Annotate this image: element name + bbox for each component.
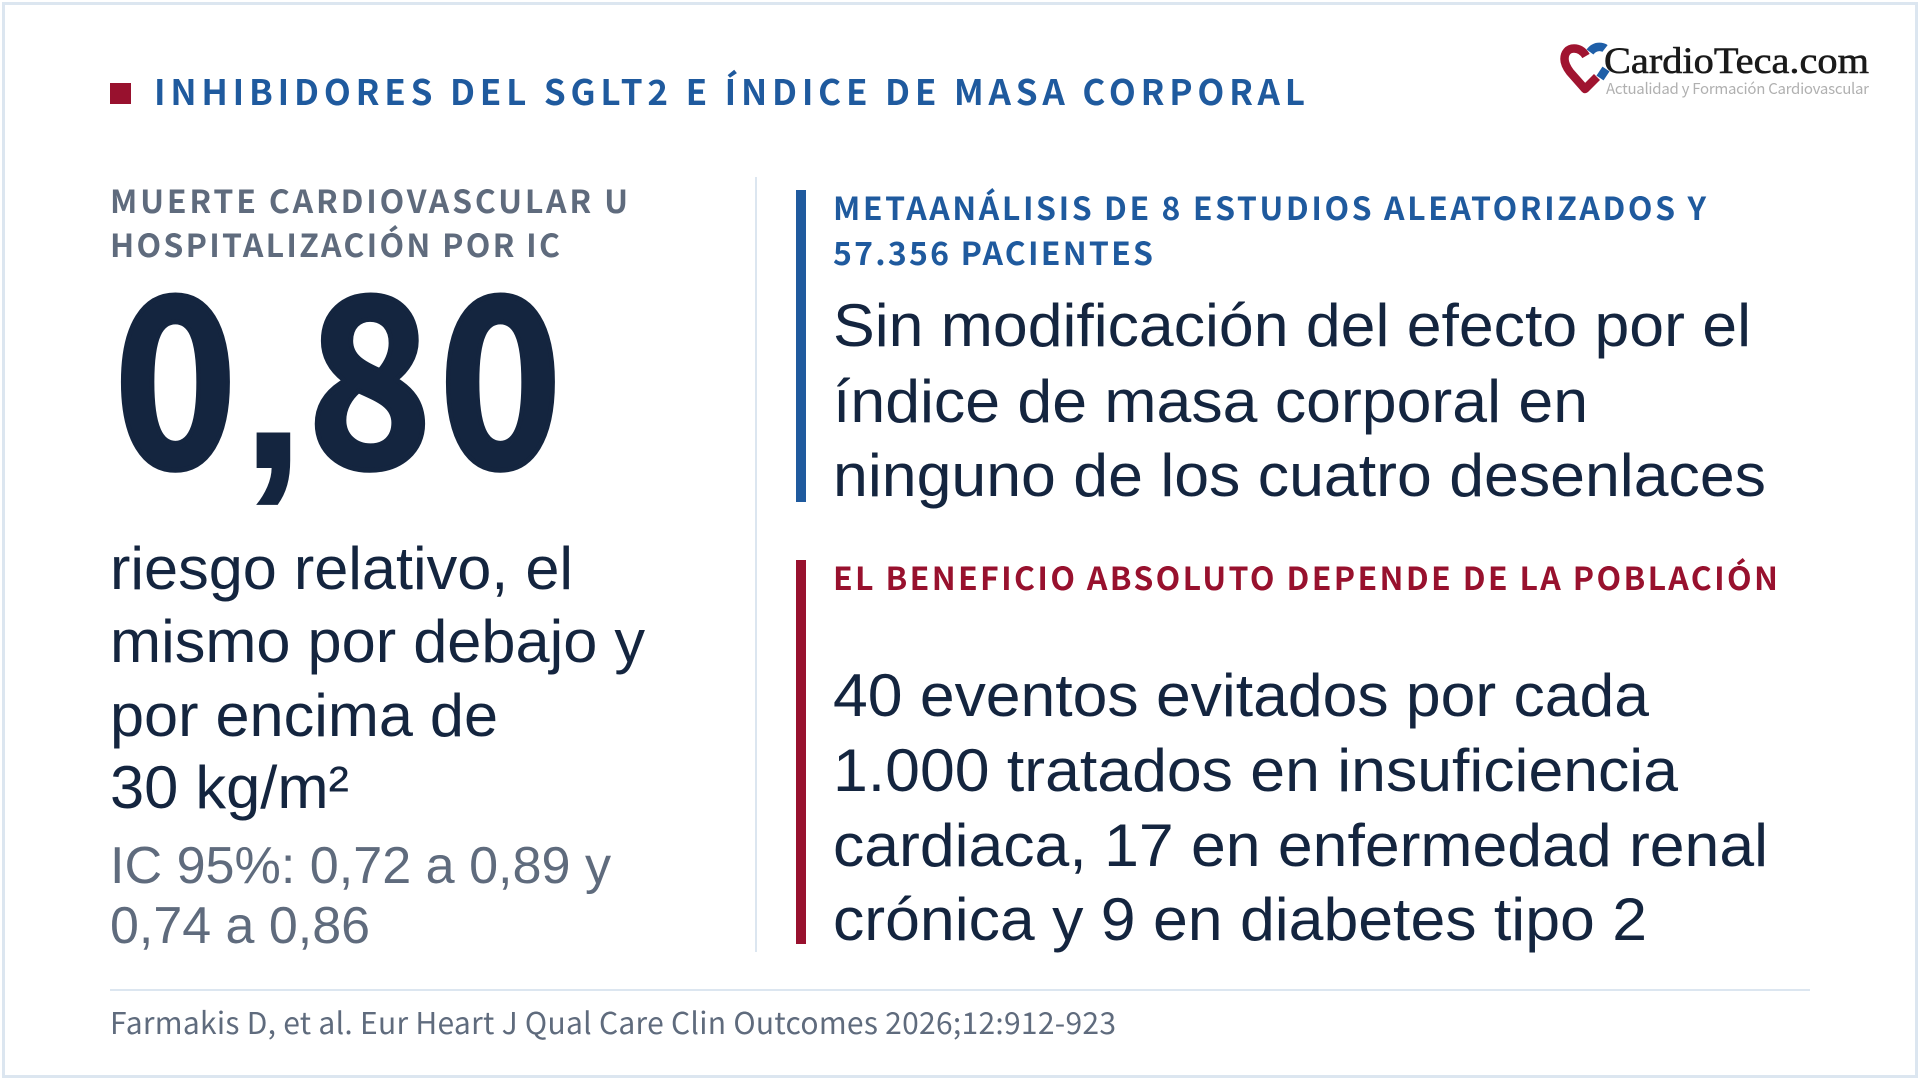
absolute benefit statement: crónica y 9 en diabetes tipo 2: [833, 886, 1647, 953]
title text: INHIBIDORES DEL SGLT2 E ÍNDICE DE MASA CORPORAL: [154, 65, 1305, 116]
big number: 8: [307, 196, 433, 535]
relative risk description: por encima de: [110, 682, 498, 749]
meta-analysis heading: METAANÁLISIS DE 8 ESTUDIOS ALEATORIZADOS Y: [833, 184, 1706, 230]
relative risk description: riesgo relativo, el: [110, 535, 573, 602]
big number: 0: [439, 196, 562, 535]
absolute benefit heading: EL BENEFICIO ABSOLUTO DEPENDE DE LA POBLACIÓN: [833, 554, 1778, 600]
left column divider: [755, 177, 757, 952]
absolute benefit statement: cardiaca, 17 en enfermedad renal: [833, 812, 1768, 879]
meta-analysis statement: ninguno de los cuatro desenlaces: [833, 442, 1766, 509]
meta-analysis heading: 57.356 PACIENTES: [833, 229, 1153, 275]
outcome label: MUERTE CARDIOVASCULAR U: [110, 177, 628, 223]
logo: CardioTeca: [1564, 41, 1869, 99]
logo tagline: Actualidad y Formación Cardiovascular: [1606, 78, 1869, 99]
outcome label: HOSPITALIZACIÓN POR IC: [110, 221, 560, 267]
big number: ,: [240, 254, 306, 519]
red accent bar: [796, 560, 806, 944]
meta-analysis statement: Sin modificación del efecto por el: [833, 292, 1751, 359]
panel: left key result: [110, 177, 645, 955]
big number: 0: [114, 196, 237, 535]
title marker square: [110, 83, 131, 104]
panel: absolute benefit: [796, 554, 1778, 953]
meta-analysis statement: [833, 292, 1766, 509]
meta-analysis heading: [833, 184, 1706, 275]
footer rule: [110, 989, 1810, 991]
title: [110, 65, 1305, 116]
icon: heart: [1564, 47, 1606, 89]
citation: Farmakis D, et al. Eur Heart J Qual Care Clin Outcomes 2026;12:912-923: [110, 999, 1116, 1043]
blue accent bar: [796, 190, 806, 502]
meta-analysis statement: índice de masa corporal en: [833, 368, 1588, 435]
confidence intervals: IC 95%: 0,72 a 0,89 y: [110, 837, 611, 895]
outcome label: [110, 177, 628, 267]
big number: [114, 196, 562, 535]
relative risk description: mismo por debajo y: [110, 608, 645, 675]
absolute benefit statement: [833, 662, 1768, 953]
absolute benefit statement: 40 eventos evitados por cada: [833, 662, 1650, 729]
panel: meta-analysis: [796, 184, 1766, 509]
absolute benefit statement: 1.000 tratados en insuficiencia: [833, 737, 1679, 804]
confidence intervals: 0,74 a 0,86: [110, 897, 370, 955]
confidence intervals: [110, 837, 611, 955]
relative risk description: [110, 535, 645, 821]
relative risk description: 30 kg/m²: [110, 754, 349, 821]
logo wordmark: CardioTeca.com: [1604, 41, 1869, 82]
